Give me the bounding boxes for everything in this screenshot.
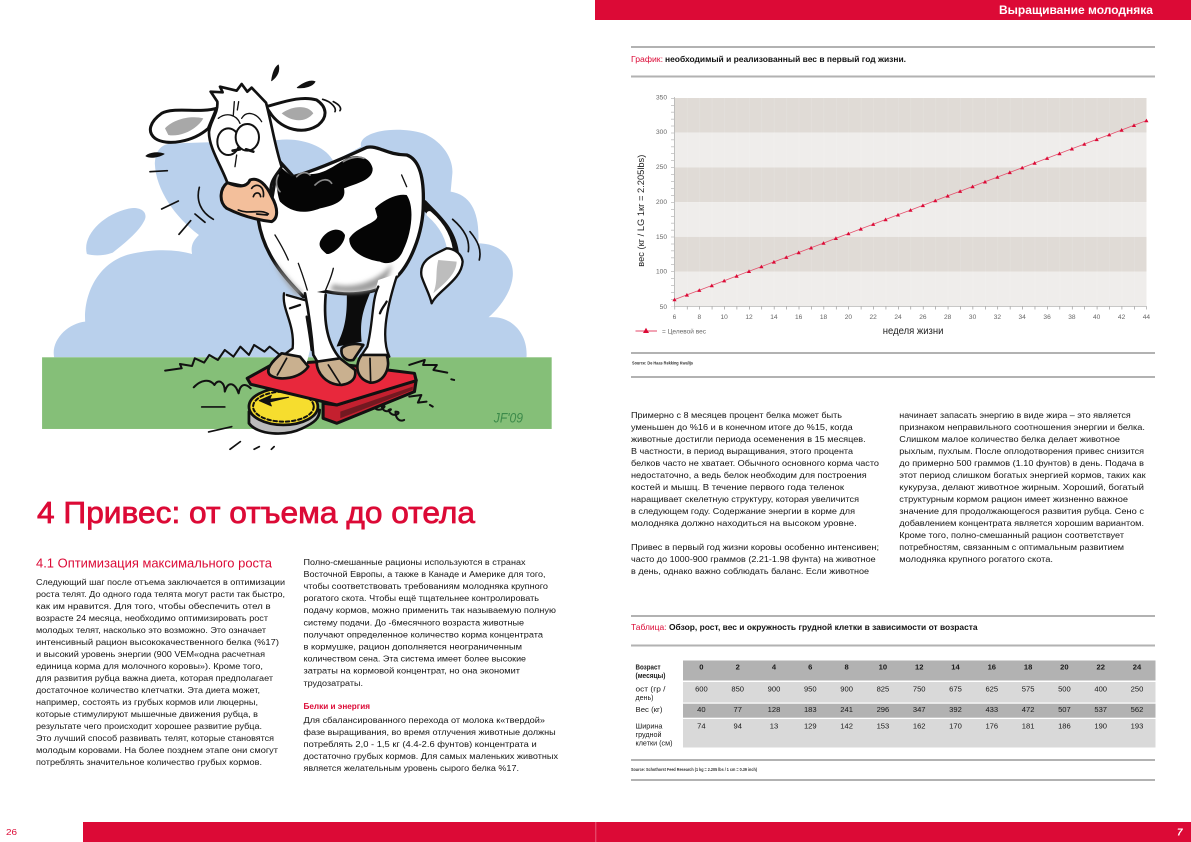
text column 4: этот период слишком богатых энергией кормов, таких как	[899, 470, 1146, 480]
row: chest width: 129	[804, 722, 817, 730]
text column 3: животные достигли периода осеменения в 15 месяцев.	[631, 434, 866, 444]
row: chest width: 74	[697, 722, 706, 730]
text column 1	[36, 556, 285, 767]
tail	[421, 204, 480, 303]
row: chest width: 94	[733, 722, 742, 730]
text column 2: является желательным уровень сырого белка %17.	[304, 763, 519, 773]
row: weight: 537	[1094, 705, 1107, 714]
text column 1: достаточное количество клетчатки. Эта диета может,	[36, 685, 260, 695]
text column 1: для развития рубца важна диета, которая предполагает	[36, 673, 273, 683]
hooves	[268, 344, 388, 385]
text column 4: молодняка крупного рогатого скота.	[899, 554, 1053, 564]
page number left: 26	[6, 828, 18, 837]
text column 3: В частности, в период выращивания, этого процента	[631, 446, 853, 456]
nose	[221, 179, 277, 222]
row labels: ост (гр /	[636, 684, 666, 694]
x axis labels: 32	[994, 314, 1001, 321]
text column 4: до примерно 500 граммов (1.10 фунтов) в день. Подача в	[899, 458, 1144, 468]
text column 1: роста телят. До одного года телята могут расти так быстро,	[36, 589, 285, 599]
text column 4: признаком неправильного соотношения энергии и белка.	[899, 422, 1145, 432]
row labels: клетки (см)	[636, 738, 673, 748]
row: daily growth: 900	[840, 684, 853, 694]
text column 2: Восточной Европы, а также в Канаде и Америке для того,	[304, 569, 546, 579]
text column 4: рыхлым, пухлым. После оплодотворения привес снизится	[899, 446, 1144, 456]
row: weight: 241	[840, 705, 853, 714]
chart source: Source: De Haas Rekking Kwalijs	[632, 360, 694, 366]
text column 1: Следующий шаг после отъема заключается в оптимизации	[36, 577, 285, 587]
row: weight: 40	[697, 705, 706, 714]
chart heading: График:	[631, 54, 663, 64]
row: age: 4	[772, 662, 777, 672]
row: daily growth: 825	[877, 684, 889, 694]
x axis labels: 18	[820, 314, 827, 321]
x axis labels: 42	[1118, 314, 1126, 321]
row: chest width: 193	[1131, 722, 1143, 730]
row: daily growth: 250	[1131, 684, 1143, 694]
row: daily growth: 850	[731, 684, 744, 694]
text column 2: фазе выращивания, во время отлучения животные должны	[304, 727, 556, 737]
header bar: Выращивание молодняка	[999, 3, 1153, 17]
illustration: cow on a scale	[42, 65, 552, 449]
row: age: 10	[879, 662, 887, 672]
row labels: Возраст	[636, 662, 661, 672]
row: weight: 296	[877, 705, 889, 714]
row: weight	[697, 705, 1143, 714]
text column 2: затраты на кормовой концентрат, но она экономит	[304, 666, 520, 676]
row: age: 6	[808, 662, 812, 672]
row: age: 20	[1060, 662, 1069, 672]
x axis labels: 28	[944, 314, 952, 321]
x axis title: неделя жизни	[883, 326, 943, 337]
text column 2: в кормушке, рацион дополняется неограниченным	[304, 642, 522, 652]
row: weight: 183	[804, 705, 817, 714]
row: daily growth: 500	[1058, 684, 1071, 694]
row: chest width: 186	[1058, 722, 1071, 730]
row labels: Вес (кг)	[636, 705, 663, 714]
x axis labels: 30	[969, 314, 977, 321]
text column 4: Кроме того, полно-смешанный рацион соответствует	[899, 530, 1124, 540]
text column 1: потреблять значительное количество грубых кормов.	[36, 757, 262, 767]
x axis labels: 14	[770, 314, 778, 321]
row: weight: 433	[985, 705, 998, 714]
text column 2: рогатого скота. Чтобы ещё тщательнее контролировать	[304, 593, 540, 603]
row: daily growth: 575	[1022, 684, 1034, 694]
x axis labels: 6	[673, 314, 677, 321]
x axis labels: 34	[1019, 314, 1026, 321]
text column 3: в следующем году. Содержание энергии в корме для	[631, 506, 855, 516]
landscape and scale	[42, 130, 552, 449]
y axis labels: 250	[656, 164, 667, 171]
row labels: грудной	[636, 730, 662, 739]
row labels	[636, 662, 673, 748]
x axis labels: 36	[1043, 314, 1051, 321]
row: daily growth: 750	[913, 684, 926, 694]
text column 1: и высокий уровень энергии (900 VEM«одна расчетная	[36, 649, 265, 659]
sweat drops and motion lines	[146, 65, 341, 234]
row: age: 16	[988, 662, 996, 672]
text column 2: достаточно грубых кормов. Для самых маленьких животных	[304, 751, 559, 761]
x axis labels: 38	[1068, 314, 1076, 321]
row: age: 0	[699, 662, 704, 672]
text column 3: Примерно с 8 месяцев процент белка может быть	[631, 410, 843, 420]
text column 2: количеством сена. Эта система имеет более высокие	[304, 654, 526, 664]
table heading	[631, 615, 1155, 646]
x axis labels: 12	[745, 314, 753, 321]
text column 1: которые стимулируют мышечные движения рубца, в	[36, 709, 258, 719]
legend	[636, 328, 707, 336]
text column 1: единица корма для молочного коровы»). Кроме того,	[36, 661, 263, 671]
x axis labels: 8	[697, 314, 701, 321]
data table	[636, 660, 1156, 748]
text column 4: значение для продолжающегося развития рубца. Сено с	[899, 506, 1145, 516]
line chart: target weight by week	[636, 94, 1150, 337]
row: weight: 392	[949, 705, 962, 714]
x axis labels: 26	[919, 314, 927, 321]
text column 2: трудозатраты.	[304, 678, 363, 688]
table heading: Обзор, рост, вес и окружность грудной клетки в зависимости от возраста	[669, 622, 978, 632]
row: daily growth: 675	[949, 684, 962, 694]
row: weight: 507	[1058, 705, 1071, 714]
row: chest width: 181	[1022, 722, 1034, 730]
text column 1: возрасте 24 месяца, необходимо оптимизировать рост	[36, 613, 268, 623]
row: daily growth: 400	[1094, 684, 1107, 694]
row: age: 2	[736, 662, 740, 672]
row: weight: 128	[768, 705, 780, 714]
text column 3: молодняка должно находиться на высоком уровне.	[631, 518, 857, 528]
x axis labels: 40	[1093, 314, 1101, 321]
table source: Source: Schothorst Feed Research (1 kg = 2.205 lbs / 1 cm = 0.39 inch)	[631, 767, 758, 772]
cow	[146, 65, 480, 385]
text column 1: Это лучший способ развивать телят, которые становятся	[36, 733, 274, 743]
row labels: день)	[636, 693, 654, 702]
scale dial	[249, 388, 320, 434]
row: daily growth: 900	[768, 684, 780, 694]
y axis labels: 350	[656, 94, 667, 102]
row: weight: 562	[1131, 705, 1143, 714]
text column 2: систему подачи. До -6месячного возраста животные	[304, 617, 524, 627]
row: weight: 347	[913, 705, 926, 714]
header bar	[595, 0, 1191, 20]
x axis labels: 24	[894, 314, 902, 321]
y axis labels: 100	[656, 268, 667, 276]
row: age: 14	[951, 662, 960, 672]
text column 3: в день, однако важно соблюдать баланс. Если животное	[631, 566, 869, 576]
text column 1: например, состоять из грубых кормов или люцерны,	[36, 697, 258, 707]
x axis labels: 20	[845, 314, 852, 321]
text column 2: подачу кормов, можно применить так называемую полную	[304, 605, 557, 615]
row: daily growth: 625	[985, 684, 998, 694]
row: age	[699, 662, 1142, 672]
row: chest width	[697, 722, 1143, 730]
subheading: Белки и энергия	[304, 701, 370, 711]
chart heading	[631, 46, 1155, 78]
illustrator signature: JF'09	[493, 411, 523, 427]
row labels: Ширина	[636, 722, 663, 730]
scale box	[247, 362, 416, 423]
table heading: Таблица:	[631, 622, 666, 632]
text column 4: структурным кормом рацион имеет жизненно важное	[899, 494, 1128, 504]
row: daily growth: 600	[695, 684, 708, 694]
x axis labels: 10	[721, 314, 728, 321]
text column 2: чтобы соответствовать требованиям молодняка крупного	[304, 581, 548, 591]
ears	[150, 98, 325, 142]
y axis labels: 50	[660, 304, 667, 311]
text column 4: начинает запасать энергию в виде жира – это является	[899, 410, 1131, 420]
row: age: 18	[1024, 662, 1032, 672]
text column 4: Слишком малое количество белка делает животное	[899, 434, 1120, 444]
section heading: 4.1 Оптимизация максимального роста	[36, 556, 273, 570]
text column 3: белков часто не хватает. Обычного основного корма часто	[631, 458, 879, 468]
text column 2: потреблять 2,0 - 1,5 кг (4.4-2.6 фунтов) концентрата и	[304, 739, 537, 749]
face details	[217, 102, 268, 215]
x axis labels: 22	[870, 314, 877, 321]
chart heading: необходимый и реализованный вес в первый год жизни.	[665, 54, 906, 64]
text column 4: добавлением концентрата является хорошим вариантом.	[899, 518, 1144, 528]
y axis title: вес (кг / LG 1кг = 2.205lbs)	[636, 155, 646, 267]
y axis labels: 150	[656, 234, 667, 241]
hidden hind leg	[337, 290, 370, 347]
footer bar	[6, 822, 1191, 842]
text column 4: потребностям, связанным с оптимальным развитием	[899, 542, 1124, 552]
text column 3: Привес в первый год жизни коровы особенно интенсивен;	[631, 542, 879, 552]
text column 2: Для сбалансированного перехода от молока к«твердой»	[304, 715, 545, 725]
footer bar: 7	[1177, 828, 1183, 838]
text column 2	[304, 557, 559, 773]
row: chest width: 190	[1094, 722, 1107, 730]
row: chest width: 13	[770, 722, 778, 730]
text column 3: недостаточно, а ведь белок необходим для построения	[631, 470, 867, 480]
text column 2: получают определенное количество корма концентрата	[304, 629, 543, 639]
row: chest width: 162	[913, 722, 926, 730]
row: chest width: 170	[949, 722, 962, 730]
row: chest width: 142	[840, 722, 853, 730]
legend: = Целевой вес	[662, 328, 707, 336]
text column 3: уменьшен до %16 и в конечном итоге до %15, когда	[631, 422, 853, 432]
text column 1: результате чего происходит хорошее развитие рубца.	[36, 721, 262, 731]
row: daily growth	[695, 684, 1143, 694]
row: age: 12	[915, 662, 923, 672]
text column 2: Полно-смешанные рационы используются в странах	[304, 557, 526, 567]
body spots	[277, 156, 411, 263]
text column 3: часто до 1000-900 граммов (2.21-1.98 фунта) на животное	[631, 554, 876, 564]
text column 3: костей и мышц. В течение первого года теленок	[631, 482, 844, 492]
text column 1: молодых телят, насколько это возможно. Это означает	[36, 625, 266, 635]
head	[209, 84, 282, 192]
row: chest width: 176	[985, 722, 998, 730]
x axis labels: 16	[795, 314, 803, 321]
row: daily growth: 950	[804, 684, 817, 694]
row: age: 22	[1096, 662, 1105, 672]
text column 1: интенсивный рацион высококачественного белка (%17)	[36, 637, 279, 647]
legs	[280, 273, 398, 363]
row: weight: 77	[733, 705, 742, 714]
text column 1: как им нравится. Для того, чтобы обеспечить отел в	[36, 601, 271, 611]
chapter title: 4 Привес: от отъема до отела	[37, 495, 476, 530]
cow body	[258, 147, 423, 297]
y axis labels	[656, 94, 667, 311]
x axis labels: 44	[1143, 314, 1150, 321]
x axis labels	[673, 314, 1150, 321]
row labels: (месяцы)	[636, 671, 666, 680]
text column 4	[899, 410, 1146, 564]
target weight line	[674, 121, 1146, 300]
text column 3	[631, 410, 879, 576]
row: chest width: 153	[877, 722, 889, 730]
y axis labels: 200	[656, 199, 667, 206]
y axis labels: 300	[656, 129, 667, 136]
row: age: 8	[844, 662, 849, 672]
text column 1: молодым коровами. На более позднем этапе они смогут	[36, 745, 278, 755]
row: weight: 472	[1022, 705, 1034, 714]
row: age: 24	[1133, 662, 1142, 672]
text column 4: кукуруза, делают животное жирным. Хороший, богатый	[899, 482, 1144, 492]
text column 3: наращивает скелетную структуру, которая увеличится	[631, 494, 859, 504]
